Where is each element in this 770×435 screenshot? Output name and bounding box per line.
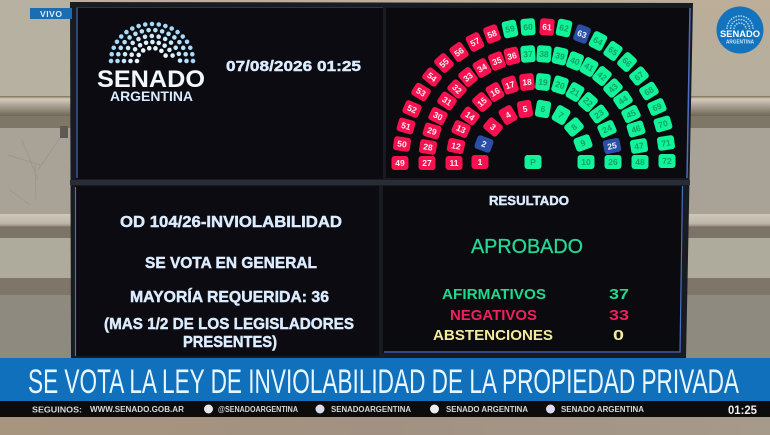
footer: facebook handle: SENADO ARGENTINA (446, 405, 528, 414)
seats: row 1: 2 (480, 138, 488, 150)
seats: row 4: 57 (469, 35, 482, 49)
footer: website: WWW.SENADO.GOB.AR (90, 405, 184, 414)
seats: row 4: 72 (662, 156, 672, 166)
seats: row 3: 42 (595, 69, 609, 83)
tally: affirmative (442, 286, 629, 303)
seats: row 4: 62 (558, 22, 570, 34)
seats: row 1: 6 (540, 104, 546, 114)
seats: row 1: 3 (488, 122, 498, 133)
panel: result (383, 186, 683, 353)
seats: row 3 (418, 45, 648, 170)
seats: row 3: 31 (440, 94, 454, 108)
seats: row 4: 55 (437, 56, 451, 70)
seats: row 3: 39 (554, 50, 566, 62)
seats: row 4 (392, 18, 676, 170)
seats: row 1: 4 (503, 109, 513, 121)
vote type: SE VOTA EN GENERAL (145, 255, 317, 272)
seats: row 4: 53 (414, 85, 428, 99)
seats: row 4: 69 (651, 100, 664, 113)
seats: row 3: 32 (450, 82, 464, 96)
seats: row 2: 16 (488, 85, 502, 99)
footer: follow label: SEGUINOS: (32, 406, 82, 414)
seats: row 2: 20 (554, 79, 566, 91)
seats: row 4: 60 (523, 22, 533, 32)
tally: abstentions: 0 (613, 327, 624, 344)
seats: row 3: 34 (475, 61, 489, 75)
seats: row 3: 33 (461, 70, 475, 84)
seats: row 4: 68 (642, 84, 656, 98)
panel: motion details (75, 186, 379, 356)
tally: abstentions (433, 327, 624, 344)
footer: youtube handle: SENADO ARGENTINA (561, 405, 644, 414)
seats: row 2: 14 (463, 109, 477, 123)
seats: row 4: 58 (486, 28, 498, 40)
panel: logo and date (76, 7, 383, 179)
tally: affirmative: AFIRMATIVOS (442, 286, 546, 303)
logo: SENADO: SENADO (97, 66, 205, 93)
result heading: RESULTADO (489, 193, 569, 208)
seats: row 2: 13 (455, 123, 468, 136)
channel badge (716, 6, 764, 54)
seats: row 3: 40 (569, 55, 581, 67)
seats: row 1: 5 (522, 104, 528, 114)
seats: row 1: 7 (556, 109, 566, 121)
seats: row 2: 17 (504, 79, 516, 91)
seats: row 3: 45 (625, 107, 638, 121)
panel: seat map (386, 8, 690, 178)
seats: row 4: 65 (606, 44, 620, 58)
seats: row 3: 44 (616, 93, 630, 107)
seats: row 4: 51 (400, 120, 412, 132)
seats: row 2: 25 (606, 140, 618, 152)
seats: row 4: 66 (620, 55, 634, 69)
seats: row 1: 1 (478, 157, 483, 167)
seats: row 4: 52 (406, 103, 419, 116)
footer: x handle: @SENADOARGENTINA (218, 405, 298, 414)
seats: row 1: 8 (569, 121, 579, 132)
seats: row 4: 63 (576, 28, 588, 40)
seats: row 3: 30 (432, 109, 445, 123)
footer: clock: 01:25 (728, 403, 757, 417)
result status: APROBADO (471, 236, 583, 258)
required majority: MAYORÍA REQUERIDA: 36 (130, 287, 329, 306)
seats: row 4: 64 (592, 34, 605, 48)
seats: row 2: 24 (601, 122, 614, 135)
seats: row 3: 46 (630, 123, 642, 135)
seats: row 3: 47 (634, 140, 645, 152)
seats: row 2: 12 (450, 140, 462, 152)
seats: row 3: 37 (523, 49, 533, 59)
seats: row 3: 41 (582, 60, 596, 74)
seat: presidency: P (530, 157, 536, 167)
majority note: (MAS 1/2 DE LOS LEGISLADORES (104, 316, 354, 333)
tally: negative: 33 (609, 307, 629, 324)
monitor frame (70, 2, 693, 358)
seats: row 4: 54 (425, 70, 439, 84)
seats: row 4: 49 (395, 158, 405, 168)
logo: ARGENTINA: ARGENTINA (110, 88, 193, 104)
seats: row 3: 48 (635, 157, 645, 167)
seats: row 1 (472, 99, 594, 169)
seats: row 3: 36 (506, 50, 518, 62)
seats: row 2: 23 (592, 107, 606, 121)
seats: row 3: 43 (606, 81, 620, 95)
channel badge: SENADO (720, 29, 760, 40)
seats: row 3: 35 (491, 55, 503, 67)
seats: row 4: 59 (504, 23, 516, 35)
live tag: VIVO (40, 9, 62, 19)
seats: row 2: 19 (538, 77, 548, 87)
seats: row 2: 26 (608, 157, 618, 167)
footer: instagram handle: SENADOARGENTINA (331, 405, 411, 414)
seats: row 2: 22 (581, 95, 595, 109)
seats: row 4: 56 (452, 45, 466, 59)
date and time: 07/08/2026 01:25 (226, 58, 361, 75)
majority note (104, 316, 354, 351)
live tag (30, 8, 72, 19)
logo: senado hemicycle (111, 24, 193, 61)
footer bar (0, 401, 770, 417)
seats: row 1: 10 (581, 157, 591, 167)
tally: negative (450, 307, 629, 324)
seats: row 3: 27 (422, 158, 432, 168)
seats: row 4: 67 (632, 69, 646, 83)
seats: row 4: 71 (661, 137, 672, 149)
tally: abstentions: ABSTENCIONES (433, 327, 553, 344)
channel badge: ARGENTINA (726, 40, 754, 46)
tally: affirmative: 37 (609, 286, 629, 303)
seats: row 3: 38 (539, 49, 549, 59)
seats: row 3: 28 (423, 141, 434, 153)
seats: row 4: 70 (657, 118, 669, 130)
seats: row 2: 18 (522, 77, 532, 87)
seats: row 4: 61 (542, 22, 552, 32)
seats: row 2 (446, 73, 622, 170)
tally: negative: NEGATIVOS (450, 307, 537, 324)
seats: row 2: 21 (568, 85, 582, 99)
motion title: OD 104/26-INVIOLABILIDAD (120, 214, 342, 231)
seats: row 2: 11 (450, 158, 459, 168)
seats: row 4: 50 (397, 138, 408, 150)
seats: row 3: 29 (426, 125, 438, 137)
majority note: PRESENTES) (183, 334, 277, 351)
seats: row 1: 9 (579, 137, 587, 149)
seats: row 2: 15 (475, 95, 489, 109)
seat: presidency (524, 155, 542, 169)
